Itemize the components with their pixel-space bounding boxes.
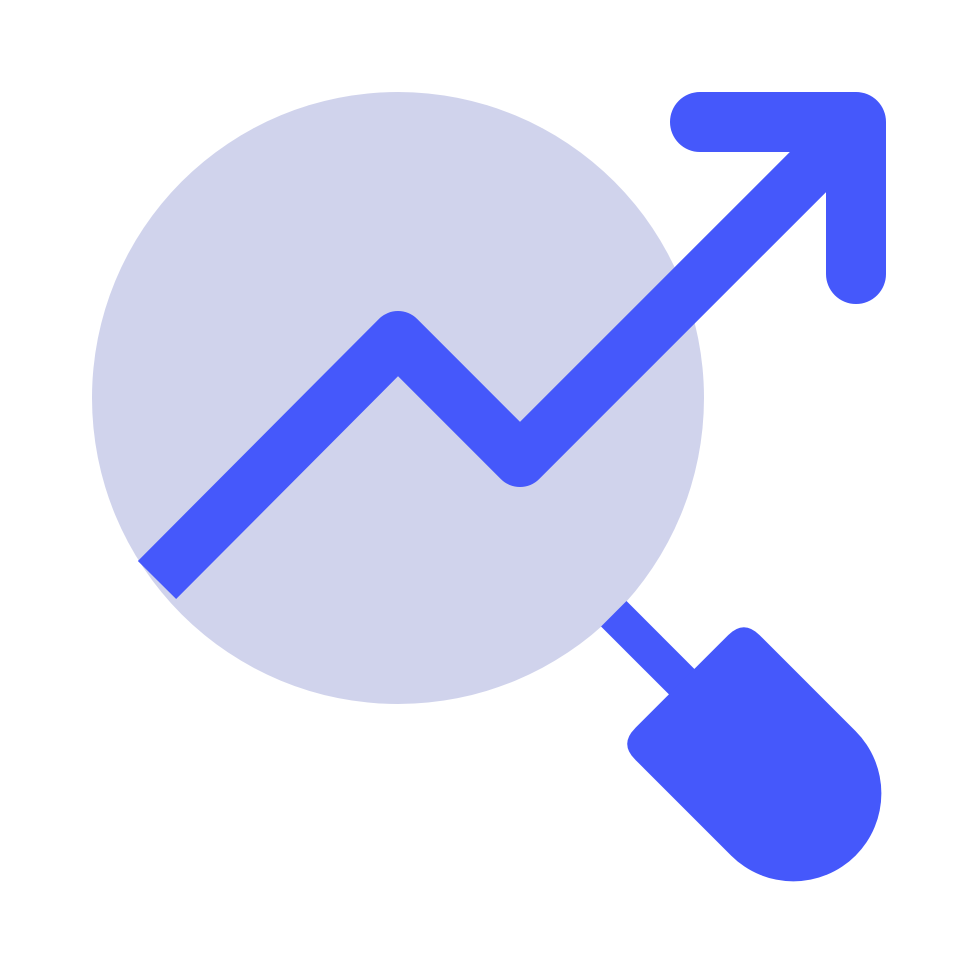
icon: trend arrow	[157, 122, 856, 580]
icon: shovel	[552, 552, 918, 918]
icon: lavender circle	[92, 92, 704, 704]
